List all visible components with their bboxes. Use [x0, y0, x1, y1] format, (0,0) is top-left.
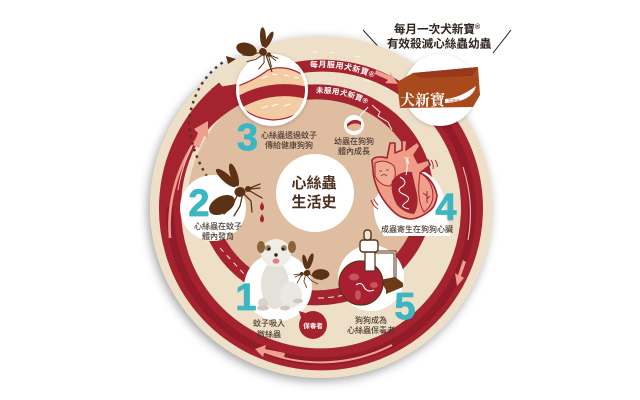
icon: dog [257, 239, 303, 310]
arrow: left ring [193, 121, 208, 148]
inner tan area [212, 98, 420, 292]
label: step 2: 體內發育 [202, 231, 234, 241]
callout line right [493, 30, 511, 53]
heading: monthly protection: 每月一次犬新寶 [394, 23, 475, 36]
skin hair marks [262, 74, 299, 108]
label: step 3: 心絲蟲透過蚊子 [261, 130, 317, 140]
label: larvae growth [334, 136, 374, 156]
step 2 circle [180, 175, 246, 241]
heading: monthly protection: 有效殺滅心絲蟲幼蟲 [387, 36, 492, 50]
label: step 2: 心絲蟲在蚊子 [194, 221, 242, 231]
number 4: 4 [435, 187, 457, 229]
arrow: right ring [455, 260, 466, 286]
label: step 2 [194, 221, 242, 241]
label: step 5: 心絲蟲保毒者 [347, 325, 395, 335]
heading: monthly protection [387, 22, 492, 50]
number 2: 2 [188, 183, 210, 225]
center circle [276, 154, 354, 232]
label: step 5 [347, 315, 395, 335]
title: life cycle [291, 174, 337, 211]
arrow: top band [375, 70, 398, 84]
callout line left [363, 30, 385, 54]
step 3: bite circle [236, 54, 308, 126]
red widening at upper left [178, 80, 262, 190]
badge: carrier: 保毒者 [303, 321, 323, 330]
icon: microscope and blood sample [339, 230, 403, 305]
panel: life cycle disc [142, 32, 496, 388]
icon: mosquito with blood [206, 162, 264, 222]
band label: monthly: 每月服用犬新寶® [310, 60, 374, 77]
inner red ring [207, 92, 426, 298]
icon: mosquito near dog [286, 246, 334, 294]
title: life cycle: 生活史 [291, 194, 337, 211]
white dashes on inner ring [220, 105, 392, 298]
title: life cycle: 心絲蟲 [291, 174, 337, 192]
icon: mosquito biting [230, 18, 290, 78]
label: step 5: 狗狗成為 [355, 315, 387, 325]
arrowhead: mosquito flight [226, 56, 236, 64]
step 5 circle [338, 245, 404, 311]
dog circle [244, 253, 312, 321]
icon: heart with worms [371, 140, 437, 219]
label: step 3: 傳給健康狗狗 [265, 140, 313, 150]
outer red ring [169, 91, 472, 362]
label: larvae growth: 體內成長 [338, 146, 370, 156]
top narrow band [262, 66, 404, 91]
label: step 1 [253, 318, 285, 339]
label: step 1: 微絲蟲 [257, 329, 281, 339]
icon: product box [397, 67, 480, 109]
label: larvae growth: 幼蟲在狗狗 [334, 136, 374, 146]
arrow: bottom ring [255, 345, 285, 357]
disc background [150, 36, 492, 378]
white circle [236, 54, 308, 126]
product circle [404, 54, 476, 126]
icon: product box: 牛肉味 [448, 98, 460, 104]
number 5: 5 [394, 286, 416, 328]
icon: product box: 犬新寶 [400, 91, 446, 109]
heart white blob [374, 172, 450, 236]
small larva circle [344, 107, 368, 135]
heading: monthly protection: ® [475, 23, 481, 31]
label: step 3 [261, 130, 317, 150]
number 1: 1 [235, 277, 257, 319]
pale dashes on disc [312, 52, 389, 90]
dotted path: mosquito flight [189, 61, 225, 188]
band label: not taking: 未服用犬新寶® [316, 86, 368, 104]
label: step 4: 成蟲寄生在狗狗心臟 [381, 224, 453, 234]
tan wedge between steps 2 and 3 [187, 93, 320, 215]
label: step 1: 蚊子吸入 [253, 318, 285, 328]
skin cross-section [238, 68, 308, 120]
badge: carrier [299, 311, 327, 339]
number 3: 3 [237, 117, 258, 159]
